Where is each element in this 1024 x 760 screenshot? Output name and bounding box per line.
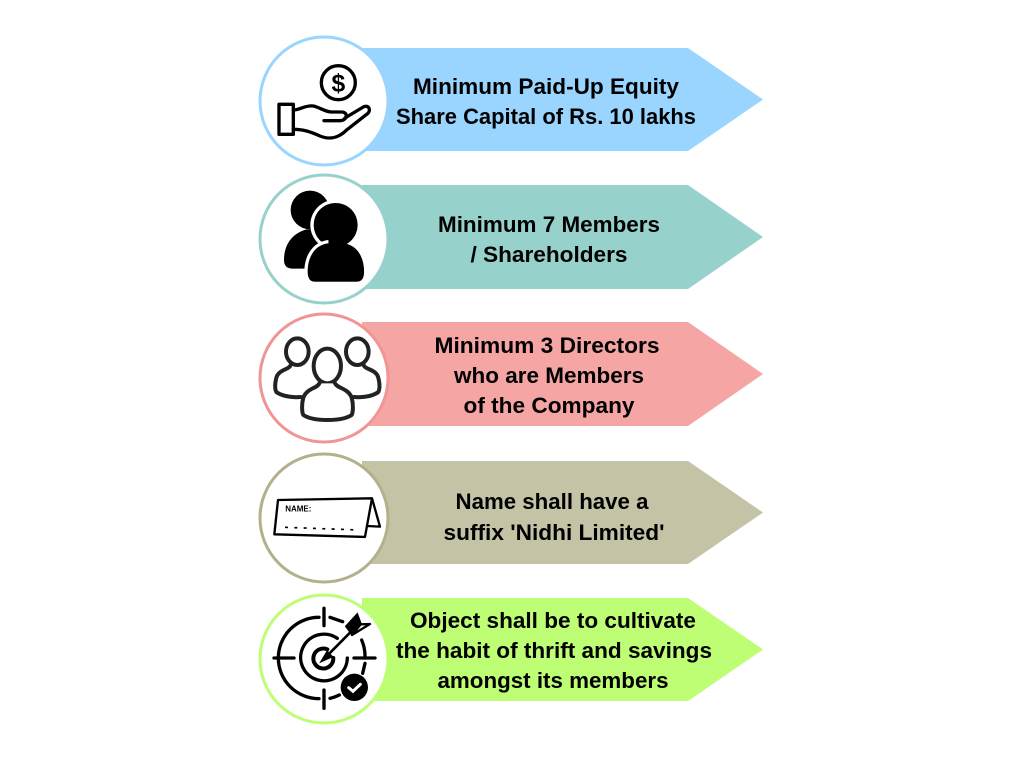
text: object: Object shall be to cultivate [410,608,696,633]
text: members: / Shareholders [470,242,628,267]
arrow: directors [362,322,763,426]
icon: two people [284,191,364,283]
text: object: the habit of thrift and savings [396,638,712,663]
text: directors: Minimum 3 Directors [434,333,660,358]
text: directors [434,333,660,418]
icon: hand with coin: $ [331,70,345,97]
text: object: amongst its members [438,668,668,693]
text: name suffix [444,489,664,545]
text: name suffix: Name shall have a [456,489,649,514]
arrow: paid-up capital [362,48,763,151]
circle: paid-up capital [260,37,388,165]
icon: target with arrow [274,608,375,708]
text: paid-up capital: Minimum Paid-Up Equity [413,74,680,99]
text: paid-up capital [396,74,696,129]
icon: name tent card [274,498,380,537]
text: members [438,212,660,267]
icon: hand with coin [279,66,369,138]
icon: three people outline [275,338,379,420]
arrow: members [362,185,763,289]
text: paid-up capital: Share Capital of Rs. 10 lakhs [396,104,696,129]
circle: name suffix [260,454,388,582]
circle: object [260,595,388,723]
arrow: name suffix [362,461,763,564]
text: members: Minimum 7 Members [438,212,660,237]
icon: name tent card: NAME: [285,504,311,513]
circle: directors [260,314,388,442]
text: directors: of the Company [464,393,635,418]
circle: members [260,175,388,303]
arrow: object [362,598,763,701]
text: object [396,608,712,693]
text: directors: who are Members [453,363,644,388]
text: name suffix: suffix 'Nidhi Limited' [444,520,664,545]
